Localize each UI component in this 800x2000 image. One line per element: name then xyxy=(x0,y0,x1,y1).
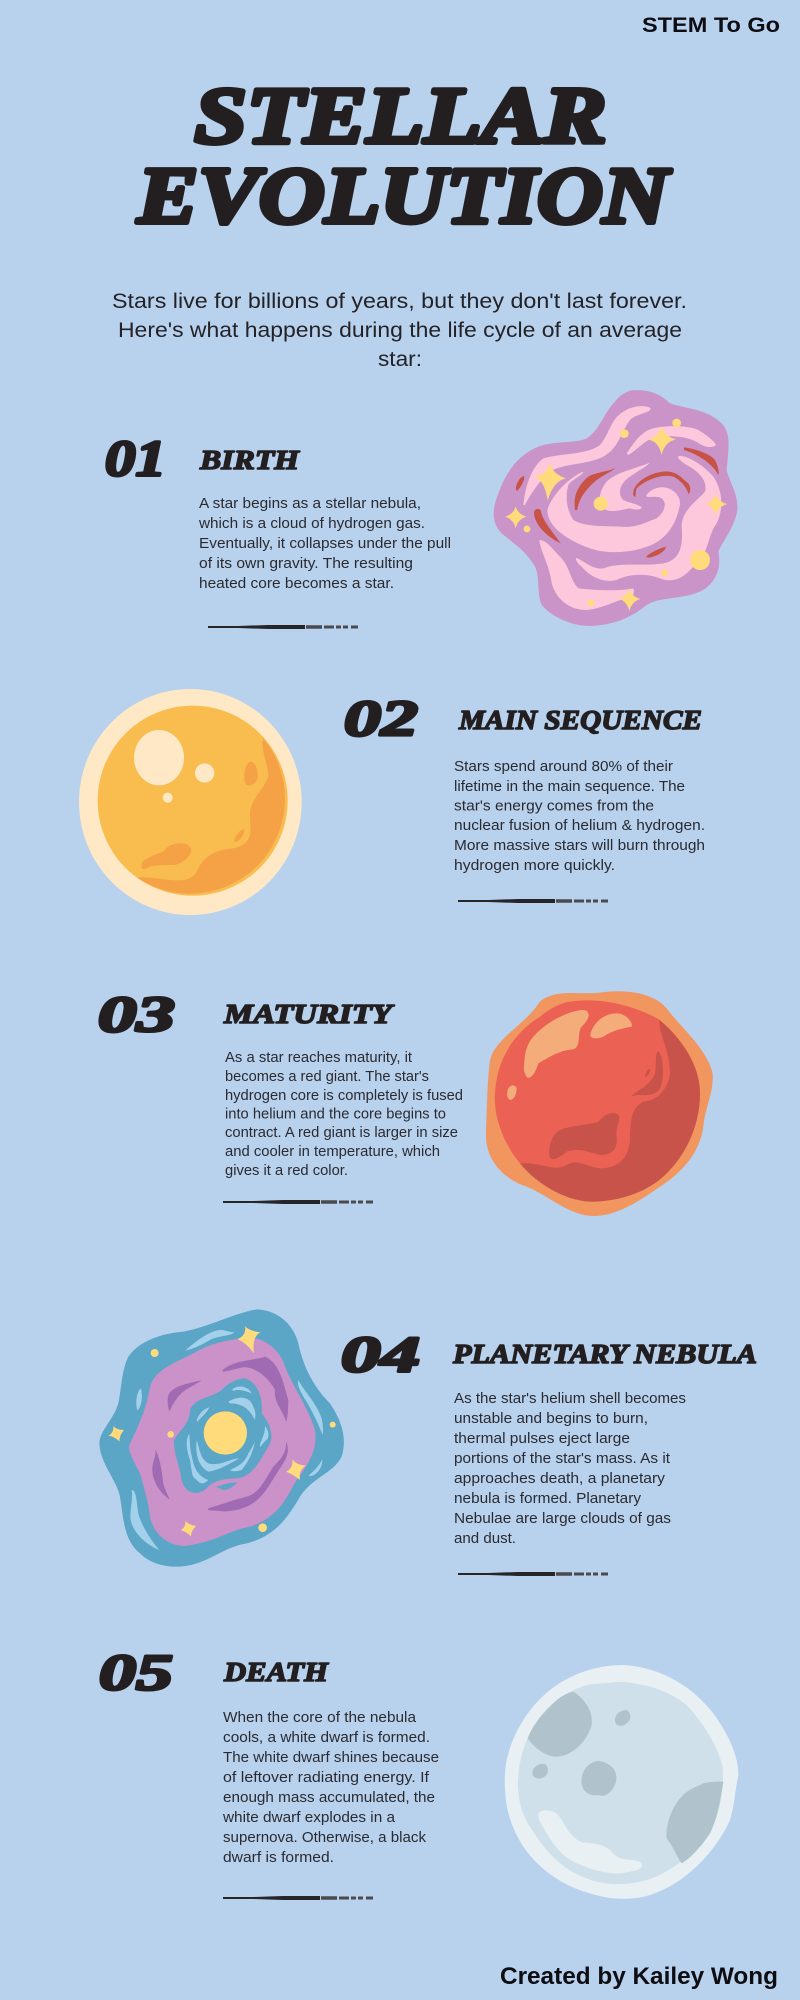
text block: main sequence: nuclear fusion of helium & hydrogen. xyxy=(454,818,705,834)
heading: maturity: MATURITY xyxy=(223,999,395,1029)
text block: death: white dwarf explodes in a xyxy=(222,1810,396,1826)
title xyxy=(136,73,672,241)
text block: death: When the core of the nebula xyxy=(223,1710,417,1726)
text block: planetary nebula: Nebulae are large clouds of gas xyxy=(454,1511,671,1527)
panel: main sequence xyxy=(79,689,705,915)
text block: maturity: gives it a red color. xyxy=(225,1163,348,1179)
text block: death: supernova. Otherwise, a black xyxy=(223,1830,427,1846)
intro text: Here's what happens during the life cycle of an average xyxy=(118,319,682,342)
text block: planetary nebula: approaches death, a planetary xyxy=(454,1471,666,1487)
text block: maturity: into helium and the core begins to xyxy=(225,1106,446,1122)
text block: planetary nebula: and dust. xyxy=(454,1531,516,1547)
text block: planetary nebula: thermal pulses eject large xyxy=(454,1431,630,1447)
title: EVOLUTION xyxy=(136,153,672,241)
text block: maturity xyxy=(225,1050,463,1179)
text block: birth: which is a cloud of hydrogen gas. xyxy=(198,516,425,532)
intro text xyxy=(112,290,687,371)
text block: birth: Eventually, it collapses under the pull xyxy=(199,536,451,552)
text block: planetary nebula: As the star's helium shell becomes xyxy=(454,1391,686,1407)
text block: death: dwarf is formed. xyxy=(223,1850,334,1866)
panel: death xyxy=(99,1646,738,1900)
heading: death: DEATH xyxy=(223,1657,329,1687)
icon: stellar nebula xyxy=(494,390,737,626)
text block: birth: heated core becomes a star. xyxy=(199,576,394,592)
brand label: STEM To Go xyxy=(642,14,780,37)
text block: death xyxy=(222,1710,439,1866)
text block: death: The white dwarf shines because xyxy=(223,1750,439,1766)
text block: maturity: and cooler in temperature, which xyxy=(225,1144,440,1160)
panel: birth xyxy=(105,390,737,629)
step number 03: 03 xyxy=(98,988,175,1044)
text block: main sequence xyxy=(454,759,705,874)
icon: red giant xyxy=(486,991,713,1216)
text block: planetary nebula: unstable and begins to burn, xyxy=(454,1411,648,1427)
heading: main sequence: MAIN SEQUENCE xyxy=(458,705,702,735)
heading: birth: BIRTH xyxy=(199,445,300,475)
step number 05: 05 xyxy=(99,1646,173,1702)
intro text: star: xyxy=(378,348,422,371)
panel: planetary nebula xyxy=(99,1309,757,1576)
title: STELLAR xyxy=(194,73,606,161)
panel: maturity xyxy=(98,988,713,1216)
text block: main sequence: Stars spend around 80% of their xyxy=(454,759,673,775)
step number 02: 02 xyxy=(344,692,418,748)
text block: death: cools, a white dwarf is formed. xyxy=(223,1730,430,1746)
text block: planetary nebula: portions of the star's mass. As it xyxy=(454,1451,670,1467)
heading: planetary nebula: PLANETARY NEBULA xyxy=(452,1339,757,1369)
icon: yellow main sequence star xyxy=(79,689,302,915)
text block: death: of leftover radiating energy. If xyxy=(223,1770,430,1786)
step number 04: 04 xyxy=(341,1328,420,1384)
text block: main sequence: More massive stars will burn through xyxy=(454,838,705,854)
icon: white dwarf xyxy=(505,1665,738,1899)
step number 01: 01 xyxy=(105,432,166,488)
text block: maturity: becomes a red giant. The star's xyxy=(225,1069,429,1085)
text block: maturity: As a star reaches maturity, it xyxy=(225,1050,412,1066)
text block: planetary nebula xyxy=(454,1391,686,1547)
text block: planetary nebula: nebula is formed. Planetary xyxy=(454,1491,642,1507)
text block: death: enough mass accumulated, the xyxy=(223,1790,435,1806)
credit: Created by Kailey Wong xyxy=(500,1963,778,1990)
text block: maturity: contract. A red giant is larger in size xyxy=(225,1125,458,1141)
intro text: Stars live for billions of years, but they don't last forever. xyxy=(112,290,687,313)
text block: main sequence: star's energy comes from the xyxy=(454,798,654,814)
text block: birth: of its own gravity. The resulting xyxy=(199,556,413,572)
text block: birth: A star begins as a stellar nebula, xyxy=(199,496,421,512)
text block: main sequence: hydrogen more quickly. xyxy=(454,858,615,874)
text block: main sequence: lifetime in the main sequence. The xyxy=(454,779,685,795)
icon: planetary nebula xyxy=(99,1309,344,1567)
text block: birth xyxy=(198,496,451,592)
text block: maturity: hydrogen core is completely is fused xyxy=(225,1088,463,1104)
